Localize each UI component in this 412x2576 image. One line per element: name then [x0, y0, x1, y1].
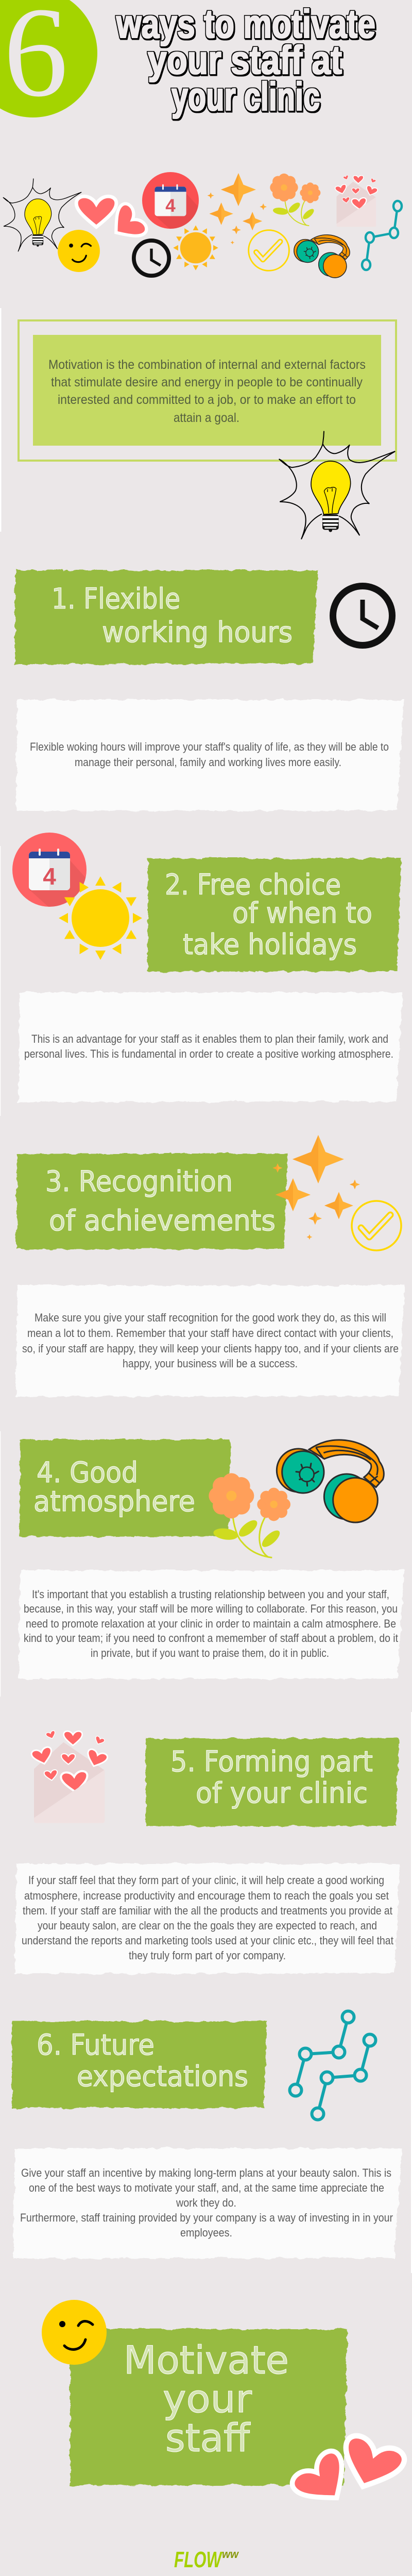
body text [22, 1311, 399, 1370]
heading text: working hours [102, 616, 293, 649]
heading text: 1. Flexible [52, 582, 180, 615]
icon: connected nodes [289, 2011, 376, 2120]
text panel [16, 700, 404, 811]
heading text: of your clinic [196, 1776, 368, 1809]
section 6: future expectations [12, 2011, 402, 2259]
section 4: good atmosphere [19, 1439, 404, 1679]
text panel [14, 1863, 400, 1974]
body text: happy, your business will be a success. [123, 1357, 298, 1370]
icon: clock [134, 241, 169, 276]
heading text: of achievements [49, 1204, 276, 1237]
heading text [52, 582, 293, 649]
panel: motivation definition [19, 320, 396, 461]
title: your staff at [148, 37, 342, 82]
icon: winking smiley [58, 230, 100, 272]
icon row [3, 172, 402, 278]
heading text: atmosphere [33, 1485, 195, 1518]
definition text: that stimulate desire and energy in people to be continually [51, 375, 363, 389]
body text [24, 1032, 393, 1060]
panel fill [33, 335, 381, 446]
heading banner [15, 570, 317, 664]
heading text [165, 868, 372, 961]
closing banner [42, 2300, 407, 2515]
icon: calendar [142, 172, 214, 244]
icon: headphones [277, 1440, 384, 1522]
heading text: 3. Recognition [45, 1165, 233, 1198]
icon: sun [173, 225, 218, 270]
icon: light bulb [3, 178, 81, 251]
icon: flowers [209, 1473, 290, 1557]
icon: love letter [31, 1730, 109, 1823]
heading text [45, 1165, 276, 1237]
heading banner [12, 2021, 267, 2108]
icon: connected nodes [362, 201, 402, 270]
icon: winking smiley [42, 2300, 107, 2365]
icon: sun [59, 876, 142, 960]
heading banner [20, 1439, 231, 1537]
icon: light bulb large [279, 431, 395, 539]
icon: headphones [294, 235, 350, 278]
definition text: attain a goal. [174, 411, 239, 425]
icon: flowers [270, 174, 320, 226]
heading text: expectations [77, 2060, 248, 2093]
body text [30, 740, 389, 769]
section 2: free choice of holidays [12, 833, 403, 1102]
title: your clinic [171, 74, 320, 119]
body text: they truly form part of yor company. [129, 1949, 286, 1962]
body text: employees. [180, 2226, 232, 2239]
heading text: 4. Good [37, 1456, 138, 1489]
heading text [33, 1456, 195, 1518]
definition text: Motivation is the combination of internal and external factors [48, 358, 366, 372]
body text [22, 1874, 393, 1962]
body text: work they do. [176, 2196, 236, 2209]
text panel [19, 992, 403, 1102]
definition text [48, 358, 366, 425]
heading text [170, 1745, 373, 1809]
text panel [13, 2148, 402, 2259]
logo: ww [222, 2548, 239, 2561]
banner text: Motivate [124, 2337, 289, 2383]
heading text: 6. Future [37, 2028, 154, 2061]
green circle [0, 0, 97, 117]
section 5: forming part of your clinic [14, 1730, 400, 1974]
body text [20, 2166, 393, 2239]
icon: love letter [335, 175, 378, 227]
icon: check mark [249, 230, 289, 270]
heading text: of when to [232, 896, 372, 929]
title [116, 1, 375, 119]
heading text [37, 2028, 248, 2093]
banner background [70, 2329, 347, 2485]
body text [24, 1588, 398, 1659]
banner text: your [163, 2376, 252, 2421]
body text: in private, but if you want to praise them, do it in public. [91, 1647, 329, 1659]
banner text [124, 2337, 289, 2461]
icon: calendar [12, 833, 106, 926]
header: big six and title [0, 0, 375, 124]
text panel [16, 1285, 405, 1397]
definition text: interested and committed to a job, or to make an effort to [58, 393, 356, 407]
heading text: take holidays [183, 928, 357, 961]
body text: manage their personal, family and working lives more easily. [75, 756, 341, 769]
icon: sparkles [208, 173, 267, 244]
heading text: 2. Free choice [165, 868, 341, 901]
icon: sparkles [273, 1135, 360, 1240]
icon: check mark [352, 1201, 401, 1250]
section 3: recognition of achievements [16, 1135, 405, 1397]
section 1: flexible working hours [15, 570, 404, 811]
icon: clock [333, 586, 392, 645]
banner text: staff [165, 2415, 251, 2461]
heading banner [16, 1154, 288, 1249]
heading banner [146, 1738, 399, 1826]
heading text: 5. Forming part [170, 1745, 373, 1778]
icon: two hearts [288, 2433, 407, 2515]
heading banner [148, 858, 401, 972]
text panel [19, 1570, 404, 1679]
logo: FLOW [174, 2547, 222, 2572]
panel outline [19, 320, 396, 461]
icon: two hearts [76, 196, 149, 247]
